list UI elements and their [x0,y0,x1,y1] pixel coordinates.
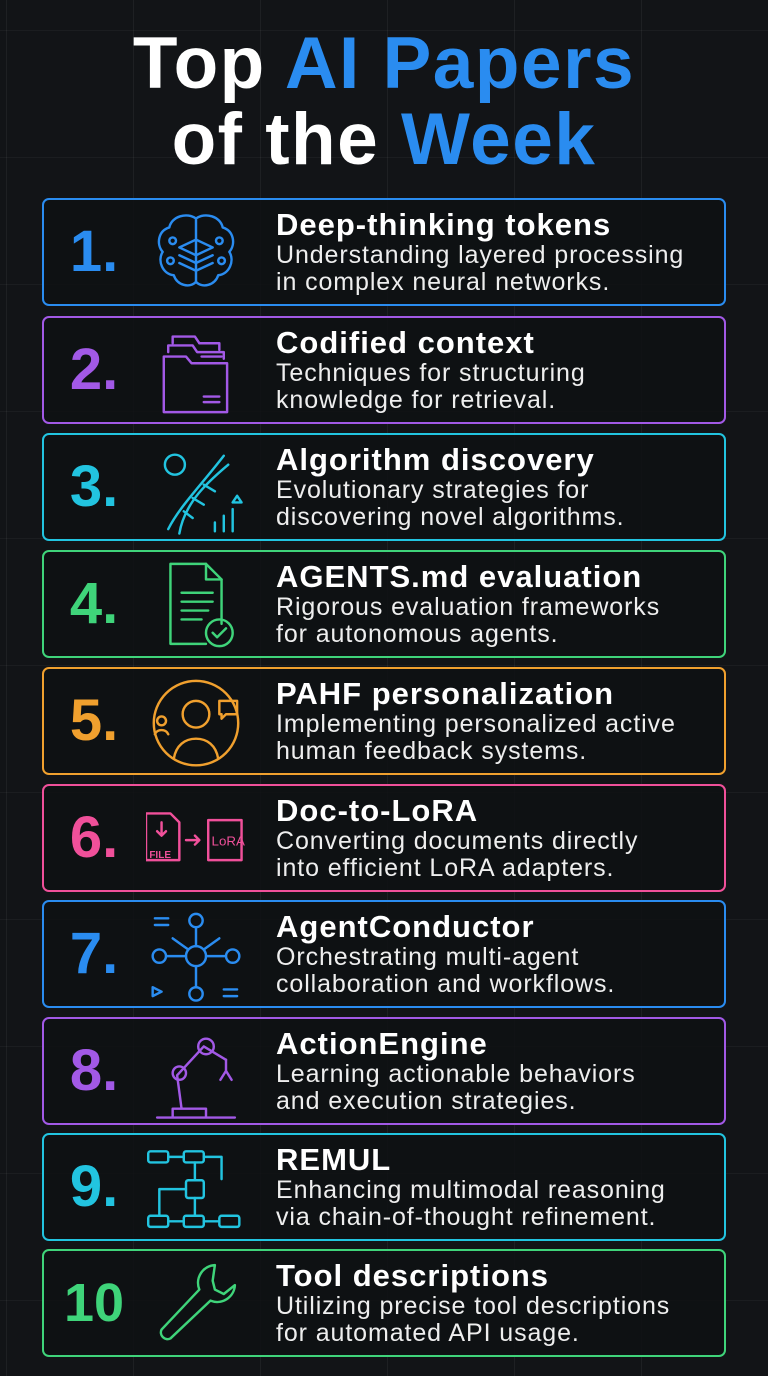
card 4: AGENTS.md evaluation [276,559,642,594]
title: Top AI Papers [133,23,635,104]
card 8: Learning actionable behaviors [276,1060,636,1088]
card 4: 4. [70,571,118,636]
card 1 [42,198,726,306]
card 9: Enhancing multimodal reasoning [276,1176,666,1204]
card 6: into efficient LoRA adapters. [276,854,614,882]
card 4: Rigorous evaluation frameworks [276,593,660,621]
card 10 [42,1249,726,1357]
card 8 [42,1017,726,1125]
card 9: via chain-of-thought refinement. [276,1203,656,1231]
title: of the Week [172,99,596,180]
icon: file to lora [146,812,245,862]
card 1: in complex neural networks. [276,268,610,296]
card 7: 7. [70,921,118,986]
icon: network [151,912,241,1002]
card 2: Codified context [276,325,535,360]
card 10: for automated API usage. [276,1319,580,1347]
card 5 [42,667,726,775]
icon: dna and gear [164,454,243,535]
icon: brain [158,214,234,287]
card 2: 2. [70,337,118,402]
card 5: human feedback systems. [276,737,587,765]
card 1: Understanding layered processing [276,241,684,269]
card 3: Algorithm discovery [276,442,595,477]
icon: person feedback [152,680,240,766]
card 4 [42,550,726,658]
icon: robot arm [156,1038,236,1119]
card 5: 5. [70,688,118,753]
card 10: Utilizing precise tool descriptions [276,1292,670,1320]
icon: folders [162,335,228,414]
icon: wrench [160,1264,236,1340]
card 9: REMUL [276,1142,391,1177]
icon: file to lora: FILE [149,850,171,861]
card 8: 8. [70,1038,118,1103]
card 6: Doc-to-LoRA [276,793,478,828]
icon: flowchart [147,1150,241,1228]
card 10: Tool descriptions [276,1258,549,1293]
card 1: Deep-thinking tokens [276,207,611,242]
card 2: knowledge for retrieval. [276,386,556,414]
card 7: Orchestrating multi-agent [276,943,579,971]
card 2 [42,316,726,424]
card 5: PAHF personalization [276,676,614,711]
card 5: Implementing personalized active [276,710,676,738]
card 6: 6. [70,805,118,870]
card 9: 9. [70,1154,118,1219]
card 6: Converting documents directly [276,827,638,855]
card 2: Techniques for structuring [276,359,586,387]
icon: document check [169,562,234,648]
card 7: AgentConductor [276,909,535,944]
card 3 [42,433,726,541]
card 8: and execution strategies. [276,1087,576,1115]
card 3: Evolutionary strategies for [276,476,589,504]
card 3: discovering novel algorithms. [276,503,624,531]
card 4: for autonomous agents. [276,620,558,648]
card 7 [42,900,726,1008]
card 8: ActionEngine [276,1026,488,1061]
card 9 [42,1133,726,1241]
card 3: 3. [70,454,118,519]
icon: file to lora: LoRA [212,834,245,849]
card 6 [42,784,726,892]
card 7: collaboration and workflows. [276,970,615,998]
title [133,23,635,180]
card 1: 1. [70,219,118,284]
card 10: 10 [64,1273,124,1333]
